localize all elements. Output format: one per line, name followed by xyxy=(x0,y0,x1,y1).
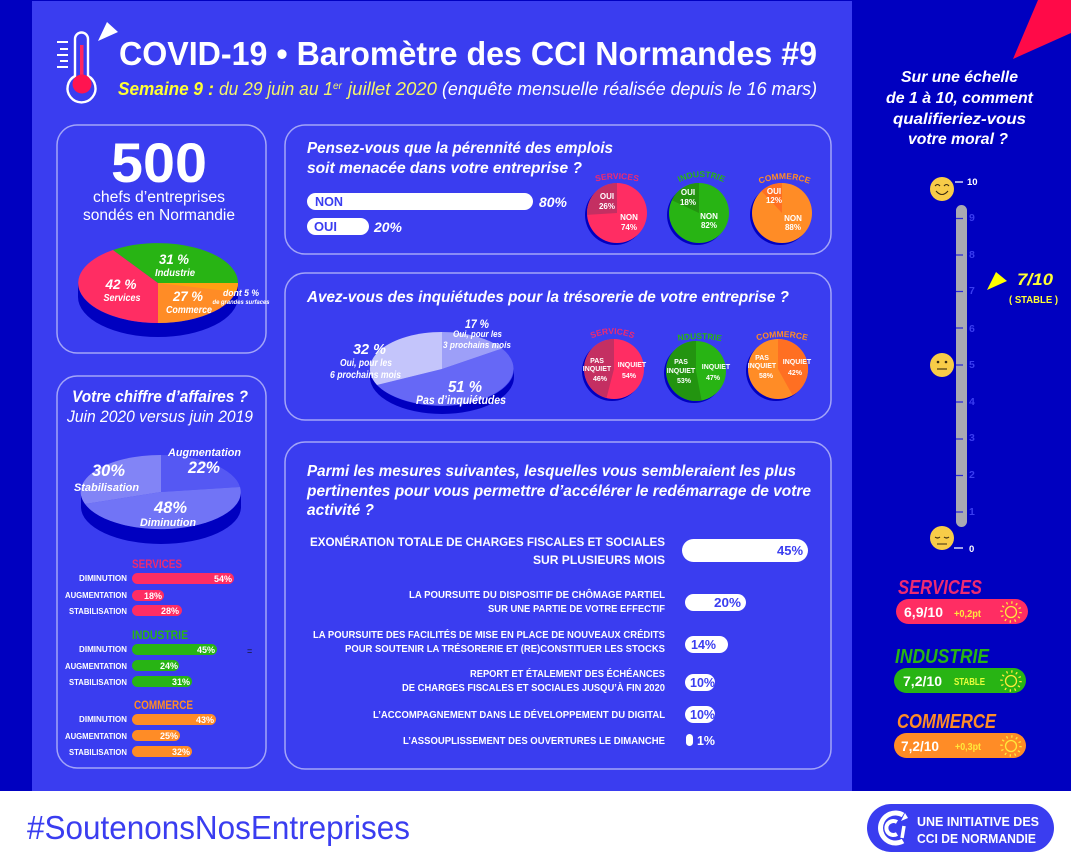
sample description: chefs d’entreprises xyxy=(93,189,225,206)
pie chart: cash flow: 51 % xyxy=(448,379,482,396)
pie: services cash flow: INQUIET xyxy=(618,362,647,369)
bar chart: services: SERVICES xyxy=(132,557,182,571)
icon: thermometer xyxy=(57,22,118,102)
subtitle: juillet 2020 xyxy=(345,79,437,99)
measure row 1% xyxy=(403,733,715,748)
panel: recovery measures: activité ? xyxy=(307,502,374,519)
pie: industrie cash flow xyxy=(664,333,731,403)
bars: non / oui xyxy=(307,193,568,235)
sector score: services: 6,9/10 xyxy=(904,604,943,620)
pie chart: sectors: 27 % xyxy=(172,288,204,304)
pie: services cash flow: PAS xyxy=(590,358,604,365)
measure row 10% report: DE CHARGES FISCALES ET SOCIALES JUSQU’À FIN 2020 xyxy=(402,681,665,694)
logo pill: CCI de Normandie: UNE INITIATIVE DES xyxy=(917,814,1039,829)
icon: neutral face xyxy=(930,353,954,377)
arrow: 7/10 marker xyxy=(987,272,1007,290)
subtitle: du 29 juin au 1 xyxy=(219,79,333,99)
bar chart: industrie xyxy=(65,628,252,687)
pie chart: revenue: Diminution xyxy=(140,517,196,529)
pie: commerce cash flow: 42% xyxy=(788,370,803,377)
panel: sample of 500 business leaders xyxy=(57,125,270,353)
morale scale: 6 xyxy=(969,323,975,335)
pie: industrie cash flow: 53% xyxy=(677,378,692,385)
morale question: de 1 à 10, comment xyxy=(886,90,1034,107)
sector score: industrie: 7,2/10 xyxy=(903,673,942,689)
measure row 14% xyxy=(313,628,728,655)
pie chart: revenue: Stabilisation xyxy=(74,482,139,494)
subtitle: (enquête mensuelle réalisée depuis le 16 mars) xyxy=(442,79,817,99)
pie chart: revenue: 22% xyxy=(187,458,220,477)
hashtag: #SoutenonsNosEntreprises xyxy=(27,809,410,846)
measure row 10% digital: 10% xyxy=(690,707,715,722)
bar chart: services: 54% xyxy=(214,574,232,584)
bar chart: services: 18% xyxy=(144,591,162,601)
pie chart: revenue: Augmentation xyxy=(167,447,241,459)
panel: sample of 500 business leaders: sondés en Normandie xyxy=(83,207,235,224)
bar chart: industrie: 31% xyxy=(172,677,190,687)
pie: commerce jobs: 88% xyxy=(785,223,801,232)
title block xyxy=(57,22,817,102)
pie: industrie cash flow: INQUIET xyxy=(702,364,731,371)
question heading: Pensez-vous que la pérennité des emplois xyxy=(307,140,613,157)
pie: services jobs: NON xyxy=(620,213,638,222)
measure row 20%: LA POURSUITE DU DISPOSITIF DE CHÔMAGE PARTIEL xyxy=(409,588,665,601)
pie: commerce jobs: 12% xyxy=(766,196,782,205)
pie chart: cash flow: Pas d’inquiétudes xyxy=(416,393,506,407)
pie: commerce cash flow: INQUIET xyxy=(748,363,777,370)
pie: industrie jobs: OUI xyxy=(681,188,695,197)
measure row 10% report: REPORT ET ÉTALEMENT DES ÉCHÉANCES xyxy=(470,667,665,680)
bar chart: services: DIMINUTION xyxy=(79,574,127,583)
panel: cash flow question xyxy=(284,272,832,421)
bar chart: services xyxy=(65,557,234,616)
morale scale: 4 xyxy=(969,396,975,408)
sector score: commerce xyxy=(894,711,1026,758)
sector score: commerce: 7,2/10 xyxy=(901,738,939,754)
pie: commerce jobs xyxy=(750,173,812,245)
pie chart: cash flow: Oui, pour les xyxy=(453,329,502,339)
morale scale: 0 xyxy=(969,544,974,555)
pie: services cash flow: SERVICES xyxy=(590,328,634,338)
footer xyxy=(0,791,1071,866)
morale score xyxy=(1009,270,1058,306)
measure row 20%: SUR UNE PARTIE DE VOTRE EFFECTIF xyxy=(488,604,665,615)
pie: industrie cash flow: PAS xyxy=(674,359,688,366)
measure row 20% xyxy=(409,588,746,615)
pie: services cash flow xyxy=(582,328,647,401)
icon: happy face xyxy=(930,177,954,201)
bar chart: industrie: DIMINUTION xyxy=(79,645,127,654)
bar chart: commerce: DIMINUTION xyxy=(79,715,127,724)
pie: services jobs: 74% xyxy=(621,223,637,232)
sector score: services xyxy=(896,577,1028,624)
pie: industrie jobs: NON xyxy=(700,212,718,221)
bars: non / oui: OUI xyxy=(314,219,337,234)
bar chart: services: 28% xyxy=(161,606,179,616)
morale scale: 5 xyxy=(969,359,975,371)
pie: industrie cash flow: 47% xyxy=(706,375,721,382)
bar chart: industrie: 24% xyxy=(160,661,178,671)
pie: services jobs: 26% xyxy=(599,202,615,211)
sector score: industrie: STABLE xyxy=(954,677,985,688)
measure row 20%: 20% xyxy=(714,595,741,610)
bar chart: commerce: 43% xyxy=(196,715,214,725)
pie: commerce jobs: COMMERCE xyxy=(758,173,811,184)
bar chart: industrie: INDUSTRIE xyxy=(132,628,188,642)
morale scale: 3 xyxy=(969,432,975,444)
morale question: votre moral ? xyxy=(908,131,1008,148)
morale question: qualifieriez-vous xyxy=(893,111,1026,128)
pie: commerce jobs: OUI xyxy=(767,187,781,196)
pie: services jobs: OUI xyxy=(600,192,614,201)
morale score: 7/10 xyxy=(1017,270,1054,289)
pie: commerce cash flow: 58% xyxy=(759,373,774,380)
pie chart: revenue: 48% xyxy=(153,498,187,517)
pie: commerce cash flow xyxy=(746,331,812,401)
panel: jobs question: soit menacée dans votre entreprise ? xyxy=(307,160,582,177)
morale scale: 2 xyxy=(969,469,975,481)
pie chart: revenue: 30% xyxy=(92,461,125,480)
bar chart: commerce: 32% xyxy=(172,747,190,757)
measure row 10% report: 10% xyxy=(690,675,715,690)
pie: commerce cash flow: INQUIET xyxy=(783,359,812,366)
pie chart: sectors xyxy=(78,243,270,337)
pie: services cash flow: 46% xyxy=(593,376,608,383)
sector score: commerce: COMMERCE xyxy=(897,711,997,733)
big number 500: 500 xyxy=(111,131,207,194)
measure row 14%: POUR SOUTENIR LA TRÉSORERIE ET (RE)CONSTITUER LES STOCKS xyxy=(345,642,665,655)
pie chart: cash flow: 6 prochains mois xyxy=(330,370,401,381)
pie chart: sectors: dont 5 % xyxy=(223,288,259,298)
pie chart: sectors: 42 % xyxy=(105,276,137,292)
pie: industrie cash flow: INQUIET xyxy=(667,368,696,375)
pie: industrie cash flow: INDUSTRIE xyxy=(678,333,722,342)
measure row 14%: 14% xyxy=(691,637,716,652)
pie: services jobs xyxy=(585,173,647,245)
measure row 14%: LA POURSUITE DES FACILITÉS DE MISE EN PLACE DE NOUVEAUX CRÉDITS xyxy=(313,628,665,641)
pie: services cash flow: 54% xyxy=(622,373,637,380)
pie chart: cash flow: 32 % xyxy=(353,341,386,358)
pie chart: sectors: Services xyxy=(104,293,141,304)
pie chart: cash flow: Oui, pour les xyxy=(340,358,392,369)
bar chart: services: STABILISATION xyxy=(69,607,127,616)
panel: recovery measures xyxy=(285,442,831,769)
sector score: industrie xyxy=(894,646,1026,693)
panel: recovery measures: pertinentes pour vous permettre d’accélérer le redémarrage de votre xyxy=(306,483,811,500)
pie chart: sectors: Commerce xyxy=(166,305,212,316)
bars: non / oui: 80% xyxy=(539,194,568,210)
bar chart: commerce: COMMERCE xyxy=(134,698,193,712)
logo pill: CCI de Normandie: CCI DE NORMANDIE xyxy=(917,831,1036,846)
pie: services jobs: SERVICES xyxy=(595,173,639,182)
sector score: industrie: INDUSTRIE xyxy=(895,646,990,668)
morale scale: 7 xyxy=(969,285,975,297)
pie: industrie jobs: 82% xyxy=(701,221,717,230)
morale question xyxy=(886,69,1034,148)
measure row 10% report xyxy=(402,667,715,694)
bar chart: industrie: 45% xyxy=(197,645,215,655)
heading: COVID-19 • Baromètre des CCI Normandes #9 xyxy=(119,35,817,72)
measure row 45% xyxy=(310,534,808,567)
bar chart: services: AUGMENTATION xyxy=(65,591,127,600)
bars: non / oui: 20% xyxy=(373,219,403,235)
morale scale: 10 xyxy=(967,177,978,188)
pie: services cash flow: INQUIET xyxy=(583,366,612,373)
pie: commerce jobs: NON xyxy=(784,214,802,223)
measure row 10% digital xyxy=(373,706,715,723)
pie: commerce cash flow: COMMERCE xyxy=(756,331,808,340)
sector score: services: SERVICES xyxy=(898,577,983,599)
pie chart: revenue xyxy=(74,447,241,544)
pie: industrie jobs: 18% xyxy=(680,198,696,207)
morale question: Sur une échelle xyxy=(901,69,1018,86)
pie: industrie jobs xyxy=(667,171,729,245)
bar chart: commerce xyxy=(65,698,216,757)
pie chart: sectors: de grandes surfaces xyxy=(212,299,270,306)
panel heading: Votre chiffre d’affaires ? xyxy=(72,387,249,406)
question heading: Parmi les mesures suivantes, lesquelles vous sembleraient les plus xyxy=(307,463,796,480)
measure row 1%: L’ASSOUPLISSEMENT DES OUVERTURES LE DIMANCHE xyxy=(403,736,665,747)
logo pill: CCI de Normandie xyxy=(867,804,1054,852)
bar chart: industrie: STABILISATION xyxy=(69,678,127,687)
bar chart: industrie: AUGMENTATION xyxy=(65,662,127,671)
bars: non / oui: NON xyxy=(315,194,343,209)
morale scale: 1 xyxy=(969,506,975,518)
measure row 45%: EXONÉRATION TOTALE DE CHARGES FISCALES ET SOCIALES xyxy=(310,534,665,549)
pie chart: cash flow xyxy=(330,317,514,414)
morale scale xyxy=(954,177,978,555)
morale score: ( STABLE ) xyxy=(1009,295,1058,306)
bar chart: industrie: = xyxy=(247,646,252,656)
pie chart: cash flow: 3 prochains mois xyxy=(443,340,511,350)
measure row 45%: SUR PLUSIEURS MOIS xyxy=(533,553,665,567)
sector score: services: +0,2pt xyxy=(954,609,982,620)
pie chart: sectors: 31 % xyxy=(159,251,190,267)
pie chart: cash flow: 17 % xyxy=(465,317,489,331)
icon: sad face xyxy=(930,526,954,550)
question heading: Avez-vous des inquiétudes pour la trésorerie de votre entreprise ? xyxy=(306,289,789,306)
corner triangle xyxy=(1013,0,1071,59)
measure row 1%: 1% xyxy=(697,733,715,748)
pie: industrie jobs: INDUSTRIE xyxy=(678,171,726,182)
panel: jobs question xyxy=(284,124,832,255)
bar chart: commerce: STABILISATION xyxy=(69,748,127,757)
bar chart: commerce: 25% xyxy=(160,731,178,741)
panel subheading: Juin 2020 versus juin 2019 xyxy=(66,407,254,426)
measure row 10% digital: L’ACCOMPAGNEMENT DANS LE DÉVELOPPEMENT DU DIGITAL xyxy=(373,708,665,721)
panel: revenue xyxy=(57,376,266,768)
pie chart: sectors: Industrie xyxy=(155,268,195,279)
morale scale: 9 xyxy=(969,212,975,224)
measure row 45%: 45% xyxy=(777,543,803,558)
morale scale: 8 xyxy=(969,249,975,261)
pie: commerce cash flow: PAS xyxy=(755,355,769,362)
subtitle: : xyxy=(208,79,214,99)
subtitle: Semaine 9 xyxy=(118,79,203,99)
subtitle: er xyxy=(333,81,343,92)
sector score: commerce: +0,3pt xyxy=(955,742,982,753)
bar chart: commerce: AUGMENTATION xyxy=(65,732,127,741)
